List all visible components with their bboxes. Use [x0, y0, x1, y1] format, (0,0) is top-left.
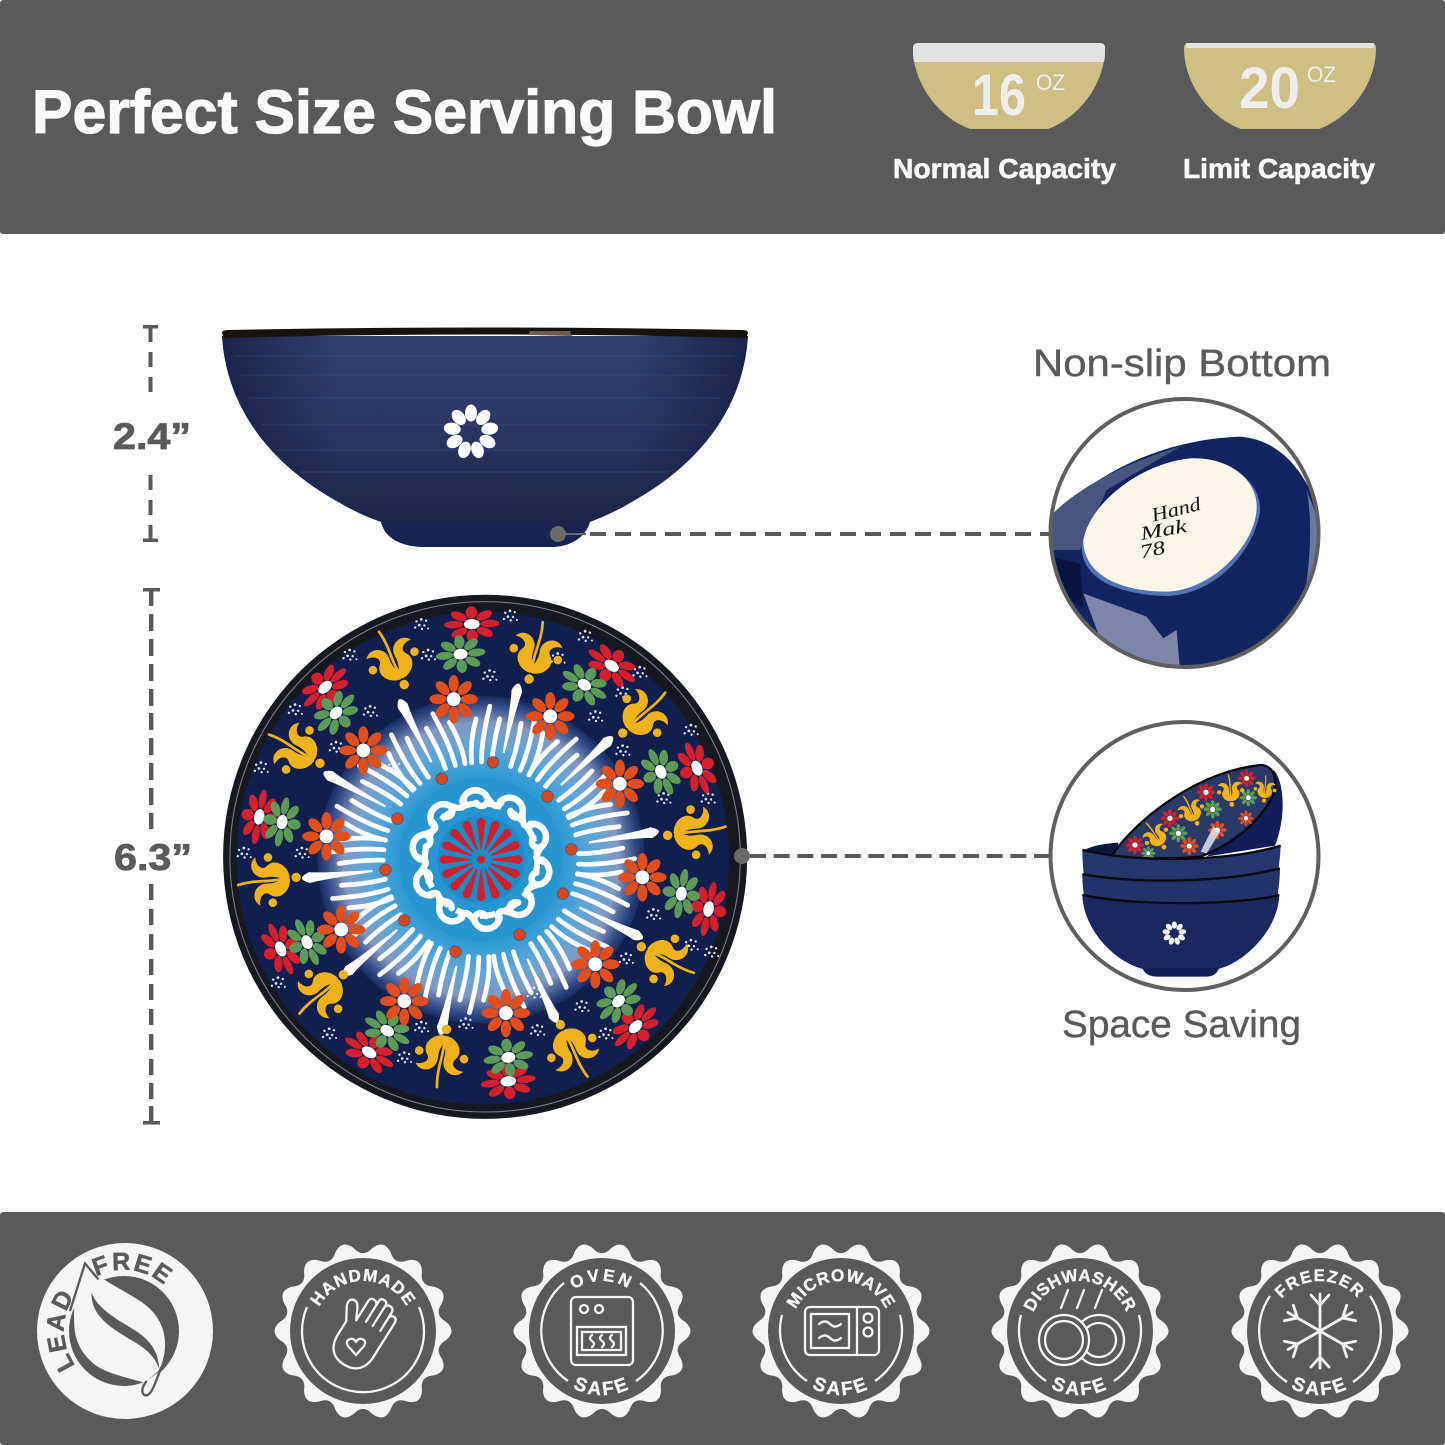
badge: freezer safe — [1232, 1244, 1408, 1418]
icon: 20 oz limit capacity bowl — [1184, 43, 1376, 129]
callout: non-slip bottom photo — [1047, 399, 1323, 673]
badge: oven safe: OVEN — [570, 1268, 632, 1288]
badge: microwave safe: SAFE — [813, 1377, 868, 1396]
connector dot: bowl rim — [734, 848, 750, 864]
callout: stacked bowls photo — [1050, 722, 1318, 990]
badge: lead free: LEAD — [46, 1292, 75, 1373]
icon: oven — [571, 1297, 633, 1365]
badge: handmade — [274, 1244, 452, 1418]
bowl side view photo — [222, 328, 748, 547]
connector dot: bowl foot — [550, 526, 586, 542]
callout: non-slip bottom photo: Hand — [1148, 494, 1203, 527]
icon: 16 oz normal capacity bowl — [913, 43, 1105, 129]
dimension line: bowl diameter — [143, 588, 160, 1124]
label: 2.4 inch height: 2.4” — [113, 416, 191, 457]
badge: freezer safe: SAFE — [1292, 1377, 1346, 1396]
panel: header band — [0, 0, 1445, 234]
icon: dishes — [1039, 1290, 1124, 1365]
badge: oven safe: SAFE — [574, 1377, 628, 1396]
badge: freezer safe: FREEZER — [1274, 1269, 1364, 1298]
badge: oven safe — [514, 1244, 690, 1418]
label: limit capacity: Limit Capacity — [1183, 153, 1375, 184]
badge: dishwasher safe: DISHWASHER — [1023, 1268, 1136, 1312]
callout: non-slip bottom photo: 78 — [1138, 537, 1168, 563]
bowl top view photo — [223, 595, 747, 1119]
dashed connector: bowl to space saving — [750, 854, 1050, 858]
icon: 16 oz normal capacity bowl: 16 — [972, 63, 1026, 128]
icon: microwave — [805, 1307, 879, 1355]
title: Perfect Size Serving Bowl — [32, 78, 777, 146]
label: 6.3 inch diameter: 6.3” — [114, 837, 192, 878]
badge: lead free — [37, 1243, 213, 1419]
icon: 20 oz limit capacity bowl: OZ — [1307, 62, 1336, 87]
callout: non-slip bottom photo: Mak — [1138, 516, 1189, 545]
heading: non-slip bottom: Non-slip Bottom — [1033, 343, 1331, 385]
icon: hand with heart — [319, 1284, 402, 1376]
dashed connector: bowl foot to non-slip bottom — [590, 532, 1050, 536]
dimension line: bowl height — [143, 325, 158, 542]
badge: dishwasher safe: SAFE — [1052, 1377, 1106, 1396]
panel: footer band — [0, 1212, 1445, 1445]
badge: lead free: FREE — [92, 1252, 174, 1285]
icon: 16 oz normal capacity bowl: OZ — [1036, 70, 1065, 95]
badge: dishwasher safe — [992, 1244, 1168, 1418]
badge: microwave safe: MICROWAVE — [786, 1269, 896, 1309]
badge: microwave safe — [752, 1244, 930, 1418]
badge: handmade: HANDMADE — [310, 1268, 416, 1306]
label: normal capacity: Normal Capacity — [893, 153, 1116, 184]
icon: 20 oz limit capacity bowl: 20 — [1239, 56, 1300, 121]
icon: snowflake — [1283, 1294, 1357, 1368]
heading: space saving: Space Saving — [1062, 1004, 1301, 1046]
